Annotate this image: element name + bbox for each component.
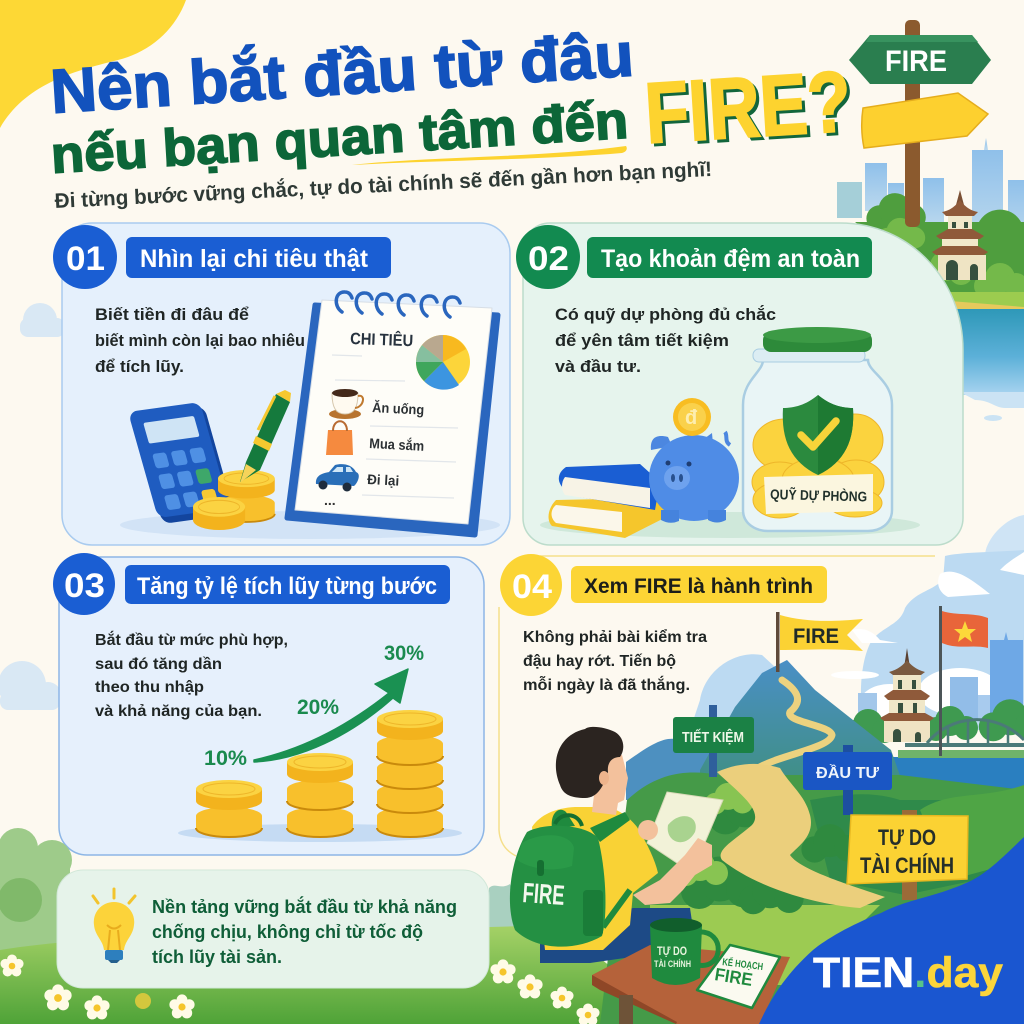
sign: TỰ DO TÀI CHÍNH	[847, 810, 968, 900]
notebook heading: CHI TIÊU	[350, 329, 413, 350]
title FIRE: FIRE?	[645, 56, 857, 165]
icon: dong coin	[673, 398, 711, 436]
body text: Không phải bài kiểm tra	[523, 628, 707, 646]
callout text: Nền tảng vững bắt đầu từ khả năng	[152, 896, 457, 917]
map	[647, 792, 723, 865]
backpack	[510, 810, 630, 947]
notebook	[287, 292, 498, 535]
heading	[587, 237, 872, 278]
cloud under lake	[960, 392, 1024, 421]
meadow	[0, 925, 680, 1024]
trees behind bridge	[842, 699, 1024, 744]
heading	[126, 237, 391, 278]
panel 04: journey	[499, 550, 1024, 1024]
plan book: KẾ HOẠCH	[722, 955, 764, 973]
panel 03: savings rate	[53, 553, 484, 855]
icon: books	[549, 464, 690, 538]
jar label	[764, 474, 873, 514]
number badge	[53, 225, 117, 289]
panel 02: safety buffer	[516, 223, 963, 545]
backpack: FIRE	[522, 877, 566, 911]
shirt	[532, 807, 658, 950]
plan book	[697, 945, 780, 1008]
post	[905, 20, 920, 227]
card	[523, 223, 963, 545]
heading	[125, 565, 450, 604]
callout text: chống chịu, không chỉ từ tốc độ	[152, 922, 423, 942]
number badge	[516, 225, 580, 289]
mountains	[626, 660, 905, 800]
signpost: FIRE	[849, 20, 991, 227]
sign: ĐẦU TƯ	[803, 745, 892, 815]
icon: calculator	[128, 402, 235, 524]
card	[62, 223, 510, 545]
heading: Nhìn lại chi tiêu thật	[140, 245, 369, 273]
ground shadow	[540, 512, 920, 538]
green sign: FIRE	[885, 45, 947, 78]
trousers	[540, 908, 694, 963]
pagoda	[932, 190, 988, 280]
lake	[945, 309, 1024, 395]
pale trees right of callout	[489, 884, 525, 950]
city skyline	[837, 138, 1024, 240]
green sign	[849, 35, 991, 84]
foreground hills	[600, 773, 1024, 1024]
icon: coins	[193, 470, 275, 530]
body text	[555, 305, 776, 376]
heading: Xem FIRE là hành trình	[584, 575, 813, 598]
mountain trail	[758, 680, 832, 768]
lake bank	[940, 292, 1024, 307]
heading: Tạo khoản đệm an toàn	[601, 245, 860, 273]
body text: biết mình còn lại bao nhiêu	[95, 332, 305, 350]
number badge	[500, 554, 562, 616]
hiker	[510, 727, 790, 1024]
lake	[885, 757, 1024, 809]
ground shadow	[178, 824, 462, 842]
yellow arrow sign	[862, 93, 988, 148]
number badge	[53, 553, 115, 615]
body text	[95, 630, 288, 720]
title line 1: Nên bắt đầu từ đâu	[48, 20, 636, 127]
label 20%: 20%	[297, 696, 339, 719]
icon: light bulb	[93, 889, 135, 963]
background trees	[0, 828, 72, 965]
flag pole: Vietnam flag	[939, 606, 988, 756]
bottom-left landscape	[0, 828, 680, 1024]
body text: Biết tiền đi đâu để	[95, 306, 249, 324]
subtitle: Đi từng bước vững chắc, tự do tài chính sẽ đến gần hơn bạn nghĩ!	[54, 157, 712, 213]
body text	[523, 628, 707, 694]
icon: dong coin: đ	[685, 407, 698, 429]
sign: TIẾT KIỆM	[673, 705, 754, 777]
yellow panel outline	[499, 556, 935, 856]
callout text	[152, 896, 457, 967]
sign: ĐẦU TƯ: ĐẦU TƯ	[816, 763, 880, 782]
number badge: 04	[512, 568, 552, 606]
body text: để tích lũy.	[95, 358, 184, 376]
ground shadow	[120, 511, 500, 539]
card	[59, 557, 484, 855]
number badge: 03	[64, 567, 105, 605]
number badge: 02	[528, 240, 569, 278]
sign: TỰ DO TÀI CHÍNH: TÀI CHÍNH	[860, 853, 954, 878]
winding path	[717, 764, 885, 908]
body text: và khả năng của bạn.	[95, 703, 262, 720]
body text: theo thu nhập	[95, 679, 204, 696]
meadow flowers	[0, 954, 600, 1024]
label: shopping: Mua sắm	[369, 434, 425, 454]
FIRE flag	[776, 612, 863, 672]
coin stack 10%	[196, 780, 262, 837]
title line 2: nếu bạn quan tâm đến	[49, 92, 630, 185]
skin: neck and face	[592, 755, 628, 815]
icon: piggy bank	[649, 432, 739, 523]
sky and clouds	[680, 550, 1024, 760]
tip callout	[57, 870, 489, 988]
table	[592, 945, 790, 1024]
top-right scenery: city, pagoda, trees and lake	[837, 138, 1024, 556]
pie chart	[416, 335, 470, 390]
sign: TIẾT KIỆM: TIẾT KIỆM	[682, 728, 744, 746]
green mug: TỰ DO	[657, 944, 687, 958]
growth arrow	[254, 669, 408, 762]
rings	[336, 292, 460, 317]
yellow underline	[352, 146, 627, 165]
heading	[571, 566, 827, 603]
plan book: FIRE	[713, 964, 754, 990]
callout card	[57, 870, 489, 988]
arms and hands	[633, 820, 712, 905]
icon: shield	[783, 395, 853, 475]
body text: Có quỹ dự phòng đủ chắc	[555, 305, 776, 324]
icon: coffee cup	[329, 389, 363, 419]
coin stack 20%	[287, 753, 353, 837]
label: transport: Đi lại	[367, 471, 400, 489]
coins inside jar	[752, 414, 884, 518]
blue corner shape	[759, 837, 1024, 1024]
icon: shopping bag	[326, 421, 353, 455]
sign: TỰ DO TÀI CHÍNH: TỰ DO	[878, 825, 936, 850]
green mug: TÀI CHÍNH	[654, 959, 691, 970]
pagoda	[880, 648, 934, 742]
city buildings	[858, 632, 1023, 725]
decorative yellow corner blob	[0, 0, 186, 128]
body text: và đầu tư.	[555, 358, 641, 376]
icon: glass jar	[743, 327, 892, 531]
ellipsis: ...	[324, 492, 336, 508]
trees	[855, 193, 1024, 295]
icon: pen	[240, 390, 291, 483]
brand corner	[759, 837, 1024, 1024]
hair	[556, 727, 623, 798]
heading: Tăng tỷ lệ tích lũy từng bước	[137, 573, 437, 600]
body text: đậu hay rớt. Tiến bộ	[523, 653, 676, 670]
body text: Bắt đầu từ mức phù hợp,	[95, 630, 288, 649]
body text	[95, 306, 305, 376]
jar label: QUỸ DỰ PHÒNG	[770, 485, 867, 505]
panel 01: spending	[53, 223, 510, 545]
body text: mỗi ngày là đã thắng.	[523, 675, 690, 694]
ear	[599, 771, 609, 785]
label: eating: Ăn uống	[372, 399, 425, 418]
body text: để yên tâm tiết kiệm	[555, 332, 729, 350]
label 30%: 30%	[384, 642, 424, 665]
FIRE flag: FIRE	[793, 625, 839, 648]
logo: TIEN.day	[813, 949, 1003, 997]
title	[48, 20, 857, 213]
number badge: 01	[66, 240, 105, 278]
title FIRE: FIRE?	[642, 54, 854, 162]
blue cloud above panel 4	[985, 515, 1024, 556]
coin stack 30%	[377, 710, 443, 837]
left side clouds	[0, 303, 65, 710]
green mug	[650, 918, 718, 985]
label 10%: 10%	[204, 747, 247, 770]
body text: sau đó tăng dần	[95, 656, 222, 673]
callout text: tích lũy tài sản.	[152, 947, 282, 967]
bridge	[905, 719, 1024, 745]
icon: car	[316, 464, 359, 492]
